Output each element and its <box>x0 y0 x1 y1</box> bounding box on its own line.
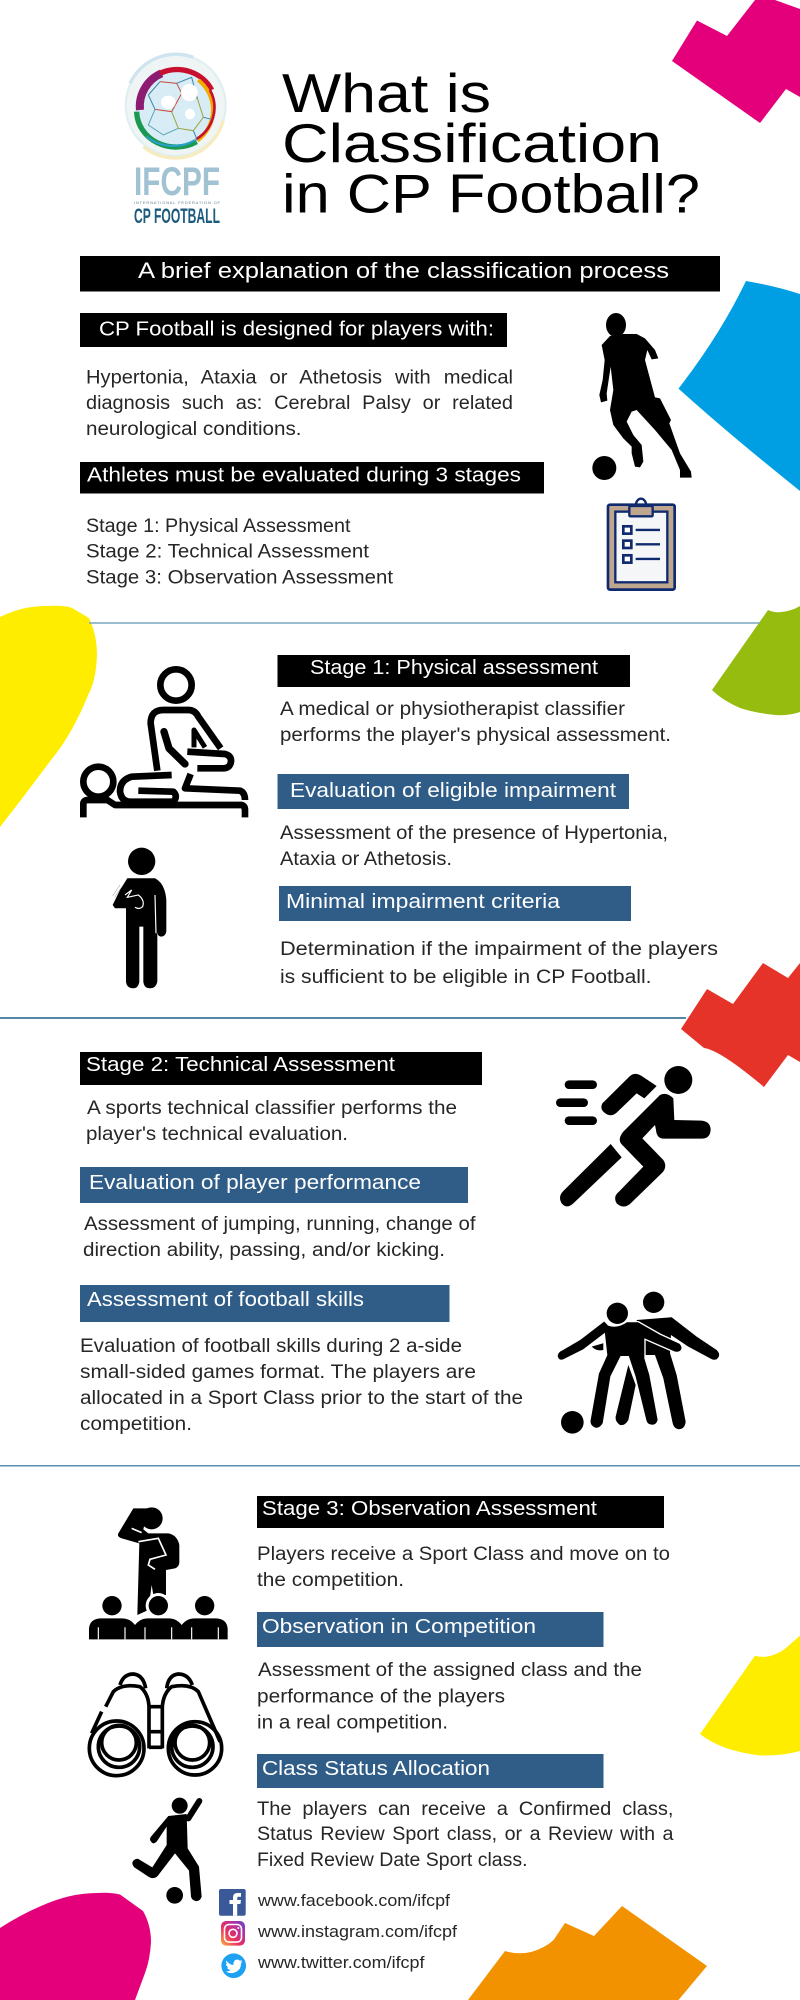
text: player performance <box>83 1214 476 1261</box>
text: player performance: direction ability, passing, and/or kicking. <box>83 1240 445 1261</box>
icon: football player silhouette <box>592 313 692 480</box>
text: class status allocation: The players can receive a Confirmed class, <box>257 1799 674 1820</box>
text: football skills: Evaluation of football skills during 2 a-side <box>80 1336 462 1357</box>
icon: speaker with audience <box>89 1507 228 1639</box>
icon: runner <box>560 1066 711 1206</box>
text: minimal impairment <box>280 939 718 988</box>
heading: observation in competition: Observation in Competition <box>262 1615 536 1638</box>
icon: kicking player <box>132 1798 202 1904</box>
heading: minimal impairment <box>279 886 631 921</box>
heading: football skills <box>80 1285 450 1322</box>
text: stage list: Stage 2: Technical Assessment <box>86 542 370 562</box>
logo CP Football: CP FOOTBALL <box>134 205 220 228</box>
social links <box>219 1889 457 1978</box>
text: stage 3 intro: the competition. <box>257 1570 404 1591</box>
text: stage 1 intro: performs the player's physical assessment. <box>280 725 671 746</box>
logo small line: INTERNATIONAL FEDERATION OF <box>134 200 221 205</box>
icon: instagram <box>221 1921 245 1946</box>
heading: stage 1 <box>278 655 630 687</box>
heading: class status allocation: Class Status Allocation <box>262 1757 490 1780</box>
decorative shape: blue right <box>678 281 800 491</box>
text: football skills: small-sided games format. The players are <box>80 1362 476 1383</box>
heading: minimal impairment: Minimal impairment criteria <box>286 890 561 913</box>
heading: designed for <box>80 313 507 347</box>
panel: stage 3 <box>257 1496 674 1871</box>
icon: players with ball <box>557 1292 719 1434</box>
text: observation in competition <box>257 1660 642 1734</box>
heading: designed for: CP Football is designed for players with: <box>99 318 494 341</box>
heading: stage 2 <box>80 1052 482 1085</box>
text: class status allocation: Status Review Sport class, or a Review with a <box>257 1824 674 1845</box>
text: twitter: www.twitter.com/ifcpf <box>257 1953 425 1972</box>
heading: stage 3 <box>257 1496 664 1528</box>
icon: twitter <box>221 1953 246 1978</box>
heading: three stages <box>80 462 544 494</box>
heading: eligible impairment <box>278 774 629 809</box>
text: class status allocation: Fixed Review Date Sport class. <box>257 1850 528 1871</box>
text: stage list: Stage 3: Observation Assessment <box>86 568 394 589</box>
decorative shape: pink bottom left <box>0 1893 151 2000</box>
decorative shape: green right <box>712 606 800 715</box>
text: stage 3 intro <box>257 1544 670 1591</box>
text: eligible impairment: Assessment of the presence of Hypertonia, <box>280 823 668 844</box>
logo: IFCPF <box>126 54 226 228</box>
text: class status allocation <box>257 1799 674 1871</box>
text: observation in competition: in a real competition. <box>257 1713 448 1734</box>
logo wordmark: IFCPF <box>134 160 220 204</box>
text: stage 1 intro: A medical or physiotherapist classifier <box>280 699 626 720</box>
title: Classification <box>282 112 662 174</box>
heading: stage 3: Stage 3: Observation Assessment <box>262 1497 597 1520</box>
text: observation in competition: performance of the players <box>257 1686 505 1707</box>
text: minimal impairment: Determination if the impairment of the players <box>280 939 718 960</box>
text: conditions: Hypertonia, Ataxia or Athetosis with medical <box>86 368 513 388</box>
text: facebook: www.facebook.com/ifcpf <box>257 1891 450 1910</box>
text: stage list <box>86 516 394 589</box>
title: What is <box>282 62 491 124</box>
text: eligible impairment <box>280 823 668 870</box>
text: stage 1 intro <box>280 699 671 746</box>
text: instagram: www.instagram.com/ifcpf <box>257 1922 457 1941</box>
text: conditions <box>86 368 513 440</box>
logo ball <box>126 54 226 158</box>
text: football skills: allocated in a Sport Class prior to the start of the <box>80 1388 523 1409</box>
panel: intro <box>80 313 544 589</box>
text: football skills <box>80 1336 523 1435</box>
heading: three stages: Athletes must be evaluated during 3 stages <box>87 464 521 487</box>
title: in CP Football? <box>282 163 700 225</box>
decorative shape: yellow left <box>0 606 97 827</box>
heading: stage 2: Stage 2: Technical Assessment <box>86 1053 395 1076</box>
icon: physiotherapist with patient <box>83 669 245 817</box>
text: stage 2 intro: player's technical evaluation. <box>86 1124 348 1145</box>
text: player performance: Assessment of jumping, running, change of <box>84 1214 476 1235</box>
icon: clipboard checklist <box>608 499 675 590</box>
decorative shape: orange bottom <box>468 1906 707 2000</box>
icon: standing person <box>113 848 166 988</box>
text: stage 2 intro <box>86 1098 457 1145</box>
text: stage 2 intro: A sports technical classifier performs the <box>87 1098 457 1119</box>
text: football skills: competition. <box>80 1414 192 1435</box>
heading: football skills: Assessment of football skills <box>87 1288 364 1311</box>
text: conditions: diagnosis such as: Cerebral Palsy or related <box>86 393 513 414</box>
text: stage 3 intro: Players receive a Sport Class and move on to <box>257 1544 670 1565</box>
text: eligible impairment: Ataxia or Athetosis. <box>280 849 452 870</box>
text: minimal impairment: is sufficient to be eligible in CP Football. <box>280 967 652 988</box>
text: conditions: neurological conditions. <box>86 419 302 440</box>
heading: player performance: Evaluation of player performance <box>89 1171 421 1194</box>
panel: stage 1 <box>278 655 718 988</box>
subtitle banner: A brief explanation of the classification process <box>138 258 669 283</box>
subtitle banner <box>80 256 720 292</box>
panel: stage 2 <box>80 1052 523 1435</box>
icon: facebook <box>219 1889 246 1916</box>
decorative shape: pink top right <box>672 0 800 123</box>
icon: binoculars <box>89 1674 222 1776</box>
heading: eligible impairment: Evaluation of eligible impairment <box>290 779 616 802</box>
heading: class status allocation <box>257 1754 604 1788</box>
heading: player performance <box>80 1167 468 1203</box>
title <box>282 62 700 225</box>
heading: stage 1: Stage 1: Physical assessment <box>310 656 598 679</box>
text: stage list: Stage 1: Physical Assessment <box>86 516 351 537</box>
decorative shape: yellow lower right <box>700 1636 800 1756</box>
heading: observation in competition <box>257 1612 604 1647</box>
decorative shape: red right <box>681 963 800 1087</box>
text: observation in competition: Assessment of the assigned class and the <box>258 1660 642 1681</box>
